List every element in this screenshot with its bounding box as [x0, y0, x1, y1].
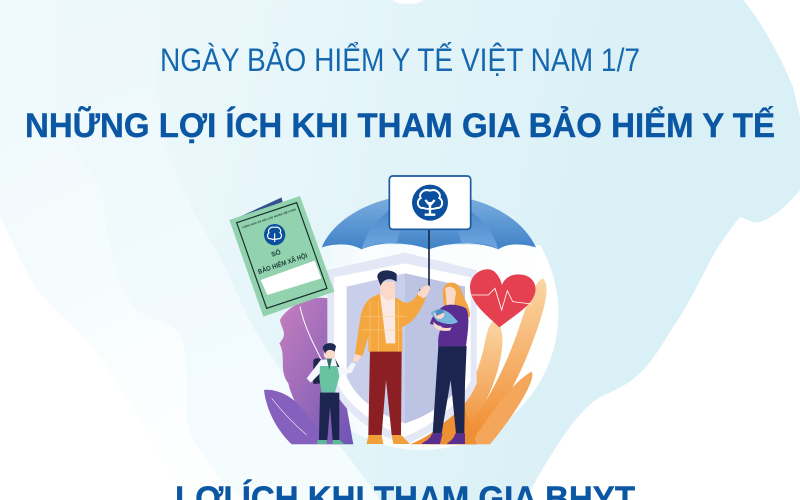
health insurance booklet	[229, 196, 334, 317]
heart with pulse line	[470, 269, 536, 327]
child	[307, 343, 356, 444]
umbrella canopy	[322, 194, 536, 249]
main title: NHỮNG LỢI ÍCH KHI THAM GIA BẢO HIỂM Y TẾ	[25, 107, 775, 145]
health insurance booklet: BẢO HIỂM XÃ HỘI	[257, 251, 309, 276]
subtitle: NGÀY BẢO HIỂM Y TẾ VIỆT NAM 1/7	[160, 42, 640, 78]
sign with logo	[389, 176, 471, 229]
health insurance booklet: SỔ	[270, 247, 282, 259]
white circle backdrop	[318, 245, 558, 450]
father	[353, 270, 430, 444]
health insurance booklet: CỘNG HÒA XÃ HỘI CHỦ NGHĨA VIỆT NAM	[241, 206, 297, 230]
orange leaves	[410, 278, 547, 444]
umbrella pole and handle	[420, 229, 429, 295]
mother and baby	[421, 283, 470, 444]
illustration: family under umbrella	[229, 176, 558, 450]
shield	[327, 253, 477, 444]
purple leaves	[264, 298, 353, 444]
